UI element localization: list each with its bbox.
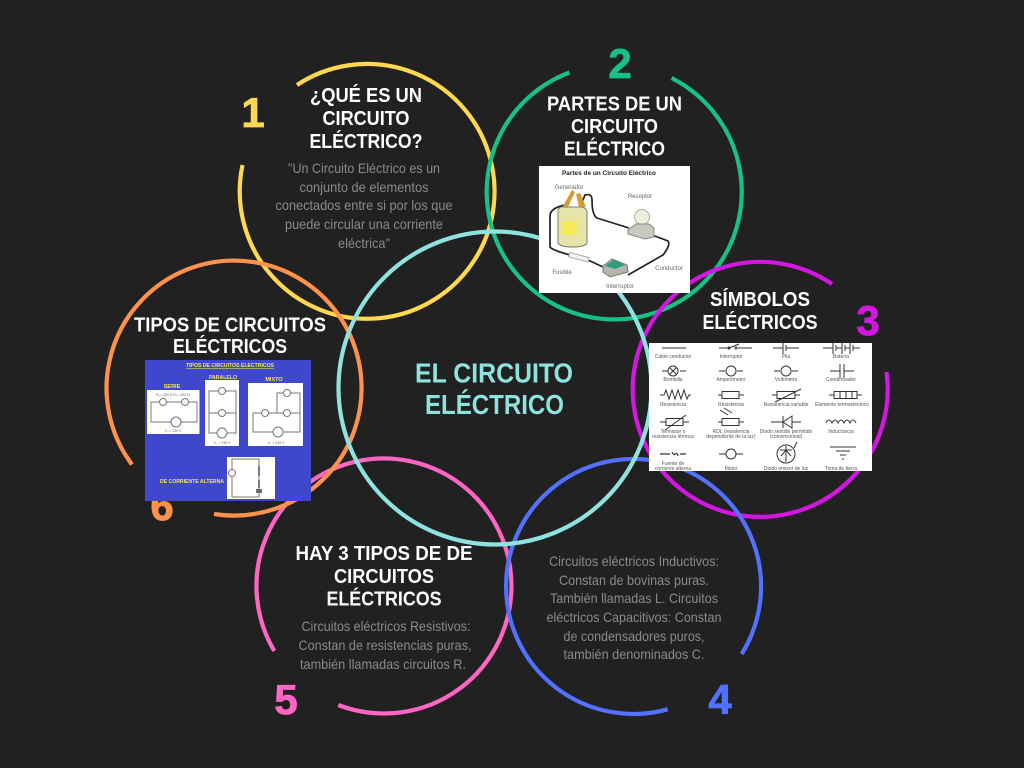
picture: electrical symbols: Termistor o — [661, 429, 686, 435]
picture: circuit types: TIPOS DE CIRCUITOS ELECTRICOS — [186, 363, 274, 369]
text: inductivos y capacitivos: de condensadores puros, — [564, 628, 704, 644]
heading: partes: CIRCUITO — [571, 115, 658, 138]
picture: electrical symbols: Voltímetro — [775, 377, 797, 383]
text: definition — [276, 160, 453, 251]
picture: electrical symbols: Elemento termoeléctrico — [815, 402, 869, 408]
picture: electrical symbols: Bombilla — [663, 377, 683, 383]
picture: circuit types: SERIE — [164, 384, 181, 390]
number 2: 2 — [608, 40, 632, 87]
picture: electrical symbols: Amperímetro — [717, 377, 746, 383]
number 1: 1 — [241, 89, 265, 136]
heading: qué es un circuito: CIRCUITO — [322, 107, 410, 130]
ring: section 2 green — [487, 72, 742, 319]
text: definition: eléctrica" — [338, 235, 390, 251]
heading: hay 3 tipos — [296, 542, 472, 610]
number 5: 5 — [274, 676, 298, 723]
central title: EL CIRCUITO — [415, 358, 573, 388]
heading: hay 3 tipos: ELÉCTRICOS — [326, 588, 442, 610]
picture: electrical symbols: Inductancia — [828, 429, 854, 435]
text: definition: conjunto de elementos — [300, 179, 428, 195]
ring: section 1 yellow — [240, 64, 495, 319]
text: resistivos: Constan de resistencias puras, — [298, 637, 472, 653]
ring: section 6 orange — [107, 261, 362, 516]
picture: electrical symbols: RDL (resistencia — [713, 429, 750, 435]
text: inductivos y capacitivos: Constan de bovinas puras. — [559, 572, 709, 588]
heading: partes — [547, 93, 682, 160]
picture: electrical symbols: Pila — [782, 354, 790, 360]
picture: electrical symbols: Toma de tierra — [825, 466, 857, 472]
number 4: 4 — [708, 676, 732, 723]
picture: circuit types: V₀ = 230 V — [214, 441, 231, 445]
picture: electrical symbols: Batería — [833, 354, 849, 360]
heading: qué es un circuito — [310, 84, 422, 153]
heading: tipos de circuitos: TIPOS DE CIRCUITOS — [134, 314, 326, 336]
picture: electrical symbols: Resistencia — [718, 402, 744, 408]
picture: circuit types: MIXTO — [265, 377, 283, 383]
text: inductivos y capacitivos — [546, 553, 722, 662]
picture: electrical symbols: Interruptor — [719, 354, 743, 360]
text: definition: conectados entre si por los que — [276, 197, 453, 213]
picture: electrical symbols — [649, 342, 872, 472]
picture: parts of a circuit — [539, 166, 690, 293]
picture: electrical symbols: Motor — [725, 466, 738, 472]
picture: parts of a circuit: Generador — [555, 185, 583, 191]
ring: section 3 magenta — [633, 262, 888, 517]
picture: circuit types: V₀ = 230 V — [268, 441, 285, 445]
heading: hay 3 tipos: CIRCUITOS — [334, 565, 434, 588]
central title: ELÉCTRICO — [425, 389, 564, 420]
text: inductivos y capacitivos: también denominados C. — [564, 646, 704, 662]
picture: circuit types: R₁= 330 Ω R₂= 330 Ω — [156, 393, 190, 397]
heading: símbolos — [702, 288, 818, 334]
picture: electrical symbols: (convencional) — [770, 434, 803, 440]
text: definition: "Un Circuito Eléctrico es un — [288, 160, 440, 176]
number 3: 3 — [856, 297, 880, 344]
picture: electrical symbols: Cable conductor — [655, 354, 692, 360]
picture: electrical symbols: dependiente de la luz) — [706, 434, 756, 440]
picture: circuit types: V₀ = 230 V — [165, 429, 182, 433]
heading: qué es un circuito: ELÉCTRICO? — [310, 130, 422, 153]
text: inductivos y capacitivos: Circuitos eléctricos Inductivos: — [549, 553, 719, 569]
text: resistivos — [298, 618, 472, 672]
heading: tipos de circuitos: ELÉCTRICOS — [173, 335, 287, 358]
heading: qué es un circuito: ¿QUÉ ES UN — [310, 84, 422, 107]
heading: símbolos: SÍMBOLOS — [710, 288, 810, 311]
picture: electrical symbols: Condensador — [826, 377, 856, 383]
ring: section 5 pink — [256, 458, 511, 713]
picture: electrical symbols: corriente alterna — [655, 466, 691, 472]
picture: electrical symbols: Resistencia — [660, 402, 686, 408]
text: resistivos: también llamadas circuitos R. — [300, 656, 466, 672]
picture: parts of a circuit: Interruptor — [606, 284, 634, 290]
text: resistivos: Circuitos eléctricos Resistivos: — [302, 618, 470, 634]
ring: central cyan — [338, 232, 652, 544]
picture: parts of a circuit: Conductor — [655, 266, 683, 272]
heading: partes: PARTES DE UN — [547, 93, 682, 116]
text: inductivos y capacitivos: eléctricos Capacitivos: Constan — [546, 609, 722, 625]
text: inductivos y capacitivos: También llamadas L. Circuitos — [550, 590, 718, 606]
heading: partes: ELÉCTRICO — [564, 138, 665, 160]
heading: tipos de circuitos — [134, 314, 326, 358]
central title — [415, 358, 573, 420]
picture: electrical symbols: Diodo sentido permitido — [760, 429, 812, 435]
picture: parts of a circuit: Receptor — [628, 194, 652, 200]
picture: electrical symbols: Resistencia variable — [764, 402, 809, 408]
text: definition: puede circular una corriente — [285, 216, 443, 232]
picture: electrical symbols: resistencia térmica — [652, 434, 694, 440]
picture: circuit types — [145, 360, 311, 501]
picture: electrical symbols: Diodo emisor de luz — [764, 466, 809, 472]
heading: hay 3 tipos: HAY 3 TIPOS DE DE — [296, 542, 472, 565]
picture: parts of a circuit: Fusible — [552, 270, 572, 276]
picture: circuit types: DE CORRIENTE ALTERNA — [160, 479, 224, 485]
picture: electrical symbols: Fuente de — [662, 461, 684, 467]
heading: símbolos: ELÉCTRICOS — [702, 311, 818, 334]
picture: parts of a circuit: Partes de un Circuito Eléctrico — [562, 170, 656, 177]
picture: circuit types: PARALELO — [209, 375, 238, 381]
number 6: 6 — [150, 482, 174, 529]
ring: section 4 blue — [506, 459, 761, 714]
